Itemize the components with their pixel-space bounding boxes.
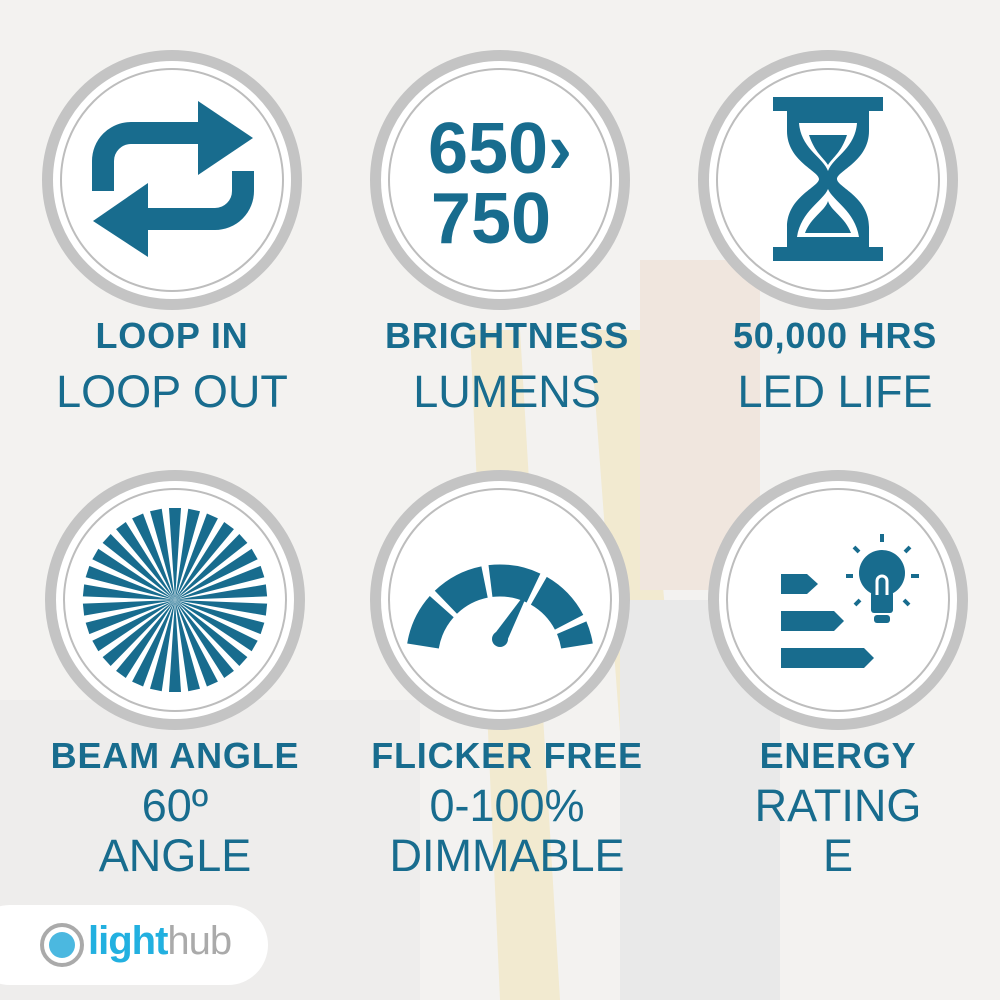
title: brightness (385, 315, 629, 417)
title: flicker free: DIMMABLE (389, 830, 625, 881)
logo: lighthub: lighthub (88, 919, 231, 963)
title: flicker free: FLICKER FREE (371, 735, 643, 776)
title: brightness: BRIGHTNESS (385, 315, 629, 356)
title: 50000 hrs (733, 315, 937, 417)
circle: lumens (370, 50, 630, 310)
circle: lumens: 650› (428, 109, 572, 189)
title: loop in: LOOP IN (96, 315, 248, 356)
title: 50000 hrs: LED LIFE (737, 366, 933, 417)
circle: loop in loop out icon (42, 50, 302, 310)
title: energy rating: E (823, 830, 853, 881)
title: beam angle: 60º (142, 780, 208, 831)
title: energy rating (755, 735, 921, 881)
title: 50000 hrs: 50,000 HRS (733, 315, 937, 356)
title: beam angle (51, 735, 299, 881)
title: brightness: LUMENS (413, 366, 601, 417)
title: loop in: LOOP OUT (56, 366, 288, 417)
circle: lumens: 750 (431, 179, 551, 259)
circle: dimmer gauge (370, 470, 630, 730)
title: loop in (56, 315, 288, 417)
title: energy rating: ENERGY (760, 735, 916, 776)
title: beam angle: ANGLE (99, 830, 251, 881)
circle: beam angle (45, 470, 305, 730)
logo: lighthub (0, 905, 268, 985)
circle: hourglass (698, 50, 958, 310)
title: flicker free: 0-100% (429, 780, 585, 831)
circle: energy rating (708, 470, 968, 730)
title: flicker free (371, 735, 643, 881)
title: energy rating: RATING (755, 780, 921, 831)
title: beam angle: BEAM ANGLE (51, 735, 299, 776)
